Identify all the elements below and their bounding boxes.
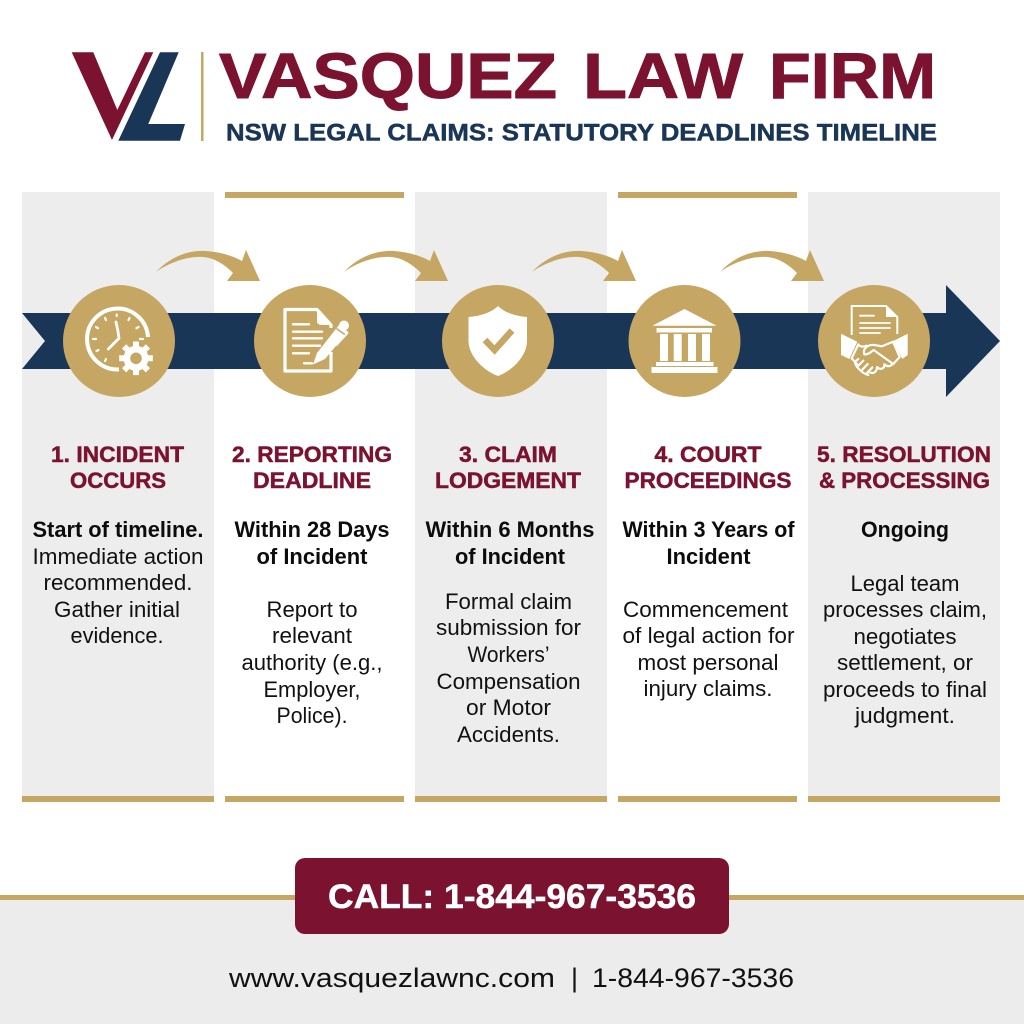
description: step 5: proceeds to final [823, 677, 987, 702]
deadline: step 4: Incident [666, 544, 751, 569]
deadline: step 3: Within 6 Months [426, 517, 594, 542]
description: step 2: Employer, [264, 677, 360, 702]
description: step 1: recommended. [44, 570, 192, 595]
heading: step 3: 3. CLAIM [459, 442, 557, 467]
heading: step 1 [51, 442, 185, 493]
description: step 5: processes claim, [823, 597, 987, 622]
description: step 1: Immediate action [32, 544, 204, 569]
icon: document with pen [254, 285, 366, 397]
heading: step 2 [232, 442, 392, 493]
panel: step 4 text [622, 442, 795, 701]
arrow: step 4 to 5 [720, 250, 824, 281]
description: step 3: Formal claim [445, 589, 572, 614]
description: step 3: submission for [436, 615, 581, 640]
panel backgrounds: grey columns [22, 192, 1000, 796]
heading: step 1: OCCURS [70, 468, 166, 493]
heading: step 5: 5. RESOLUTION [817, 442, 991, 467]
logo divider [201, 52, 204, 141]
deadline: step 2 [234, 517, 390, 569]
heading: step 5: & PROCESSING [819, 468, 990, 493]
heading: step 1: 1. INCIDENT [51, 442, 185, 467]
icon: courthouse [628, 285, 740, 397]
heading: step 3: LODGEMENT [435, 468, 582, 493]
deadline: step 4 [622, 517, 795, 569]
timeline arrow band [22, 285, 1000, 397]
description: step 2 [242, 597, 382, 728]
arrow: step 3 to 4 [532, 250, 636, 281]
description: step 2: Police). [276, 703, 348, 728]
heading: step 4: 4. COURT [654, 442, 762, 467]
description: step 3: Workers’ [468, 642, 550, 667]
arrow: step 1 to 2 [156, 250, 260, 281]
heading: step 4: PROCEEDINGS [624, 468, 792, 493]
icon: document and handshake [818, 285, 930, 397]
heading: step 4 [624, 442, 792, 493]
description: step 4: most personal [638, 650, 778, 675]
description: step 4: of legal action for [622, 623, 794, 648]
description: step 4 [622, 597, 794, 701]
logo: VL monogram [72, 52, 185, 141]
heading: step 5 [817, 442, 991, 493]
description: step 5: judgment. [854, 703, 955, 728]
description: step 5: negotiates [854, 624, 956, 649]
title: FIRM [769, 40, 936, 112]
bottom gold accents on columns [22, 796, 1000, 802]
deadline: step 2: Within 28 Days [234, 517, 390, 542]
footer contact line [228, 963, 794, 993]
panel: step 3 text [426, 442, 594, 747]
footer contact line: www.vasquezlawnc.com [228, 963, 555, 993]
deadline: step 2: of Incident [256, 544, 368, 569]
description: step 3 [436, 589, 581, 747]
deadline: step 1: Start of timeline. [32, 517, 204, 542]
description: step 4: Commencement [623, 597, 788, 622]
icon: shield with check [442, 285, 554, 397]
description: step 3: Compensation [436, 669, 580, 694]
title [219, 40, 936, 112]
description: step 5 [823, 571, 987, 728]
title: LAW [583, 40, 744, 112]
arrow: step 2 to 3 [344, 250, 448, 281]
description: step 1: evidence. [70, 623, 164, 648]
top gold accents on white columns [225, 192, 797, 198]
heading: step 3 [435, 442, 582, 493]
description: step 4: injury claims. [644, 676, 772, 701]
title: VASQUEZ [219, 40, 557, 112]
heading: step 2: 2. REPORTING [232, 442, 392, 467]
subtitle: NSW LEGAL CLAIMS: STATUTORY DEADLINES TIMELINE [226, 120, 937, 146]
panel: step 5 text [817, 442, 991, 728]
description: step 2: authority (e.g., [242, 650, 382, 675]
description: step 5: Legal team [850, 571, 960, 596]
description: step 3: or Motor [466, 695, 551, 720]
heading: step 2: DEADLINE [253, 468, 371, 493]
deadline: step 5: Ongoing [861, 517, 949, 542]
deadline: step 3 [426, 517, 594, 569]
footer contact line: | [571, 963, 578, 993]
panel: step 2 text [232, 442, 392, 728]
call button: CALL: 1-844-967-3536 [328, 878, 696, 916]
description: step 2: relevant [272, 623, 352, 648]
description: step 5: settlement, or [837, 650, 973, 675]
description: step 2: Report to [266, 597, 358, 622]
deadline: step 3: of Incident [455, 544, 566, 569]
description: step 1 [32, 544, 204, 648]
footer contact line: 1-844-967-3536 [592, 963, 794, 993]
footer gold line [0, 895, 1024, 900]
icon: clock with gear [63, 285, 175, 397]
description: step 1: Gather initial [54, 597, 180, 622]
footer background [0, 899, 1024, 1024]
deadline: step 4: Within 3 Years of [622, 517, 795, 542]
call button [295, 858, 729, 934]
description: step 3: Accidents. [457, 722, 560, 747]
panel: step 1 text [32, 442, 204, 648]
